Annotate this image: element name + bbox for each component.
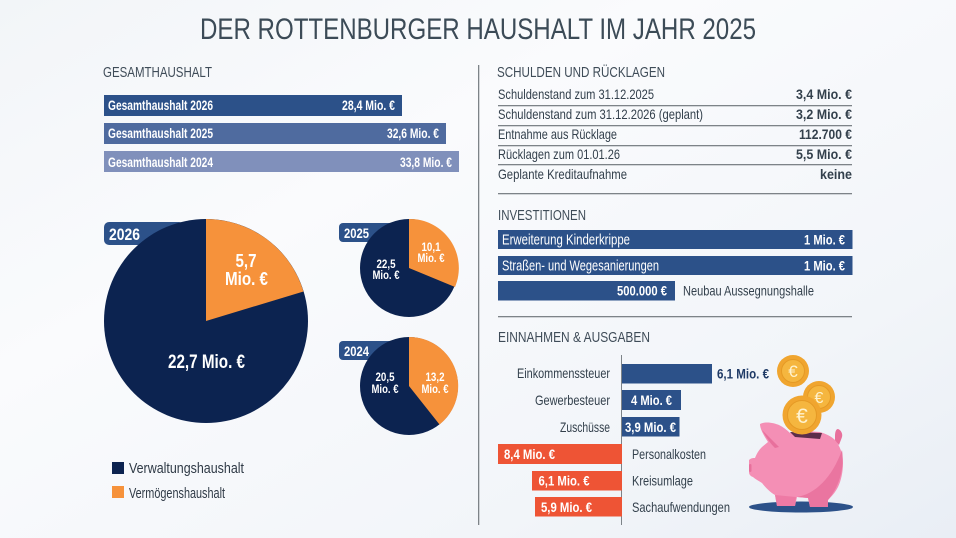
bar: Gesamthaushalt 2025: Gesamthaushalt 2025: [108, 126, 213, 141]
table row: Kreditaufnahme: [498, 166, 852, 182]
bar: Einkommenssteuer: Einkommenssteuer: [517, 365, 610, 381]
panel: Einnahmen und Ausgaben: [498, 329, 769, 525]
pie chart: 2026: Mio. €: [225, 269, 268, 289]
bar: Einkommenssteuer: 6,1 Mio. €: [717, 366, 769, 382]
legend: Vermögenshaushalt: [129, 486, 225, 502]
heading: Investitionen: INVESTITIONEN: [498, 207, 586, 224]
pie chart: 2024: 20,5: [376, 370, 395, 384]
title: DER ROTTENBURGER HAUSHALT IM JAHR 2025: [200, 13, 756, 46]
pie chart: 2025: Mio. €: [372, 268, 400, 282]
tag: 2025: 2025: [344, 225, 369, 241]
table row: Rücklagen: [498, 146, 852, 162]
pie chart: 2024: [339, 337, 458, 435]
table row: Entnahme: 112.700 €: [799, 126, 852, 142]
pie chart: 2025: [339, 219, 459, 317]
bar: Sachaufwendungen: Sachaufwendungen: [632, 499, 730, 515]
bar: Kreisumlage: [532, 471, 693, 490]
bar: Sachaufwendungen: [535, 497, 730, 516]
pie chart: 2024: Mio. €: [422, 382, 449, 396]
bar: Straßen: Straßen- und Wegesanierungen: [502, 258, 659, 274]
table row: Entnahme: [498, 126, 852, 142]
pie chart: 2024: 13,2: [426, 370, 445, 384]
table row: Rücklagen: 5,5 Mio. €: [796, 146, 852, 162]
table row: Entnahme: Entnahme aus Rücklage: [498, 126, 617, 142]
bar: Gesamthaushalt 2024: 33,8 Mio. €: [400, 155, 452, 170]
bar: Zuschüsse: 3,9 Mio. €: [625, 420, 676, 435]
bar: Gewerbesteuer: [535, 390, 681, 410]
bar: Kreisumlage: Kreisumlage: [632, 472, 693, 488]
table row: Kreditaufnahme: keine: [820, 166, 852, 182]
legend: Verwaltungshaushalt: [129, 461, 244, 477]
bar: Gesamthaushalt 2025: 32,6 Mio. €: [387, 126, 439, 141]
bar: Einkommenssteuer: [517, 364, 769, 384]
tag: 2026: [104, 222, 184, 245]
bar: Kinderkrippe: [498, 230, 852, 249]
icon: piggy bank with coins: [749, 355, 853, 512]
bar: Gewerbesteuer: Gewerbesteuer: [535, 392, 610, 408]
bar: Gesamthaushalt 2024: [104, 151, 459, 172]
bar: Gesamthaushalt 2026: [104, 95, 402, 116]
icon: pig: [749, 422, 843, 507]
bar: Straßen: [498, 256, 852, 275]
panel: Investitionen: [498, 207, 852, 300]
pie chart: 2024: Mio. €: [372, 382, 399, 396]
icon: ground shadow: [749, 502, 853, 512]
bar: Straßen: 1 Mio. €: [804, 258, 845, 274]
bar: Gesamthaushalt 2026: Gesamthaushalt 2026: [108, 98, 213, 113]
pie chart: 2026: 22,7 Mio. €: [168, 352, 245, 373]
table row: Schuldenstand 2025: [498, 86, 852, 102]
bar: Aussegnungshalle: [498, 281, 814, 300]
pie chart: 2025: 22,5: [376, 257, 396, 271]
bar: Kinderkrippe: Erweiterung Kinderkrippe: [502, 232, 630, 248]
bar: Zuschüsse: Zuschüsse: [560, 419, 610, 435]
icon: coin front: €: [796, 405, 808, 428]
bar: Personalkosten: Personalkosten: [632, 446, 706, 462]
panel: Schulden und Rücklagen: [497, 63, 852, 182]
tag: 2026: 2026: [109, 225, 140, 244]
bar: Aussegnungshalle: Neubau Aussegnungshalle: [683, 282, 814, 298]
bar: Gesamthaushalt 2025: [104, 123, 446, 144]
pie chart: 2025: Mio. €: [418, 251, 445, 265]
table row: Schuldenstand 2025: 3,4 Mio. €: [796, 86, 852, 102]
bar: Sachaufwendungen: 5,9 Mio. €: [541, 500, 592, 515]
axis: [621, 355, 622, 525]
icon: coin top: €: [788, 362, 798, 381]
icon: coin middle: [803, 381, 835, 413]
table row: Schuldenstand 2025: Schuldenstand zum 31.12.2025: [498, 86, 654, 102]
bar: Aussegnungshalle: 500.000 €: [617, 284, 667, 298]
bar: Kreisumlage: 6,1 Mio. €: [538, 474, 590, 488]
pie chart: 2026: [104, 219, 308, 423]
bar: Gewerbesteuer: 4 Mio. €: [631, 393, 672, 408]
bar: Personalkosten: [498, 444, 706, 464]
icon: coin front: [782, 396, 822, 434]
table row: Kreditaufnahme: Geplante Kreditaufnahme: [498, 166, 627, 182]
icon: coin top: [777, 355, 809, 387]
heading: Schulden und Rücklagen: SCHULDEN UND RÜCKLAGEN: [497, 63, 665, 81]
table row: Rücklagen: Rücklagen zum 01.01.26: [498, 146, 620, 162]
legend: [112, 461, 244, 502]
divider: columns: [478, 65, 479, 525]
heading: Gesamthaushalt: GESAMTHAUSHALT: [103, 64, 212, 81]
pie chart: 2025: 10,1: [422, 240, 441, 254]
panel: Gesamthaushalt: [103, 64, 459, 172]
table row: Schuldenstand 2026: Schuldenstand zum 31.12.2026 (geplant): [498, 106, 703, 122]
heading: Einnahmen und Ausgaben: EINNAHMEN & AUSGABEN: [498, 329, 650, 346]
bar: Gesamthaushalt 2026: 28,4 Mio. €: [342, 98, 395, 113]
bar: Zuschüsse: [560, 417, 680, 436]
table row: Schuldenstand 2026: 3,2 Mio. €: [796, 106, 852, 122]
icon: coin middle: €: [815, 390, 824, 407]
tag: 2024: 2024: [344, 343, 369, 359]
bar: Personalkosten: 8,4 Mio. €: [504, 447, 555, 462]
pie chart: 2026: 5,7: [236, 251, 256, 271]
bar: Gesamthaushalt 2024: Gesamthaushalt 2024: [108, 155, 213, 170]
bar: Kinderkrippe: 1 Mio. €: [804, 232, 845, 248]
